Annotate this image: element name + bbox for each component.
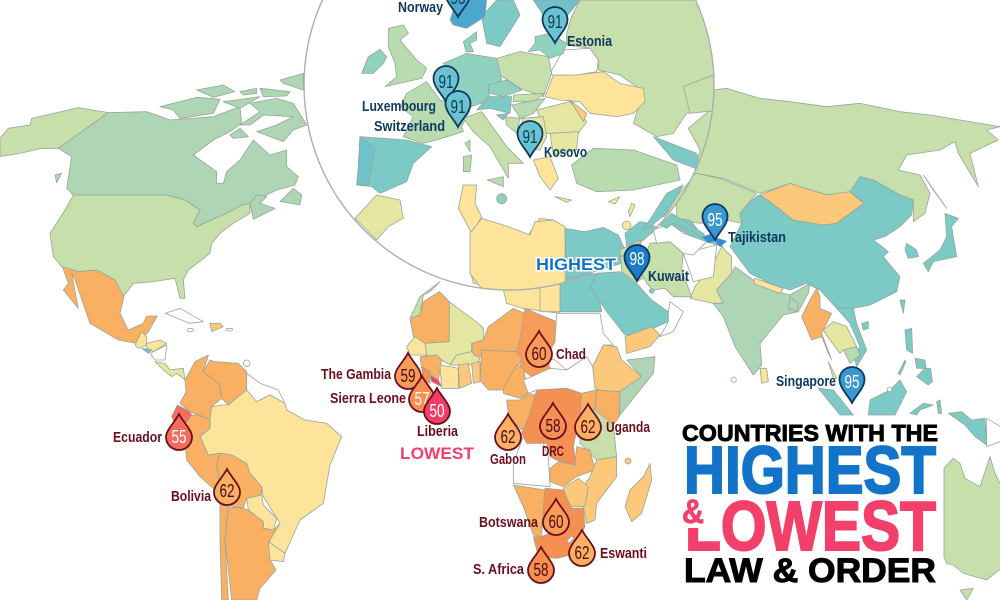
label: Sierra Leone: Sierra Leone [330,390,406,407]
drop: Gabon: 62 [500,427,516,447]
drop: Uganda [575,404,601,440]
inset circle background [304,0,714,290]
label: Estonia: Estonia [567,33,613,50]
drop: Sierra Leone [409,376,435,412]
map: Papua and Sulawesi [937,400,1000,447]
label: Uganda: Uganda [606,419,651,436]
label: LOWEST: LOWEST [400,444,475,463]
drop: Sierra Leone: 57 [414,389,430,409]
inset circle outline [304,0,714,290]
drop: Bolivia [214,469,240,505]
map: Middle East [470,203,717,353]
drop: Liberia: 50 [430,401,444,421]
drop: The Gambia [395,353,421,389]
drop: The Gambia: 59 [400,366,416,386]
label: Bolivia: Bolivia [171,488,212,505]
white cut-out above the L [680,496,716,528]
title line: Countries with the: COUNTRIES WITH THE [682,420,938,446]
label: Liberia: Liberia [417,423,459,440]
drop: Uganda: 62 [580,417,596,437]
title block [677,416,943,590]
title line: Law and order: LAW & ORDER [684,552,936,590]
pin: Switzerland [446,91,470,127]
label: Tajikistan: Tajikistan [728,229,786,246]
drop: Ecuador: 55 [172,427,186,447]
label: Botswana: Botswana [479,514,539,531]
title ampersand: & [682,493,704,531]
map: South America [155,355,342,600]
map: Asia and Russia [673,88,1000,415]
drop: South Africa [528,547,554,583]
drop: Ecuador [166,414,192,450]
pin: Tajikistan [702,204,728,240]
drop: Gabon [495,414,521,450]
title line: Highest: HIGHEST [684,433,936,508]
pin: Tajikistan: 95 [708,210,722,230]
pin: Kuwait [624,245,650,281]
drop: Liberia [424,388,450,424]
label: Gabon: Gabon [490,451,526,468]
label: The Gambia: The Gambia [321,366,392,383]
highlighted Tajikistan shape [702,233,727,247]
pin: Kosovo: 91 [522,127,538,147]
label: South Africa: S. Africa [473,561,525,578]
pin: Estonia: 91 [548,12,562,32]
drop: Bolivia: 62 [220,481,234,501]
pin: Norway [446,0,470,17]
drop: Eswanti: 62 [574,543,590,563]
drop: DRC: 58 [546,416,560,436]
label: Chad: Chad [556,346,586,363]
label: Luxembourg: Luxembourg [362,98,436,115]
label: DRC: DRC [542,443,564,460]
inset map: Europe [355,0,730,300]
title line: Lowest: LOWEST [685,487,936,565]
pin: Luxembourg [434,66,458,102]
pin: Luxembourg: 91 [438,72,454,92]
drop: Chad: 60 [532,344,546,364]
drop: DRC [540,403,566,439]
label: Singapore: Singapore [776,373,836,390]
pin: Kosovo [518,121,542,157]
drop: South Africa: 58 [534,560,548,580]
pin: Switzerland: 91 [450,97,466,117]
map: Australia [944,457,1000,600]
label: Eswanti: Eswanti [600,545,647,562]
map: Africa [407,282,655,558]
label: Kosovo: Kosovo [544,144,587,161]
pin: Estonia [542,7,568,43]
drop: Chad [526,331,552,367]
drop: Botswana [543,499,569,535]
drop: Eswanti [569,530,595,566]
pin: Singapore [840,367,864,403]
pin: Singapore: 95 [844,372,860,392]
drop: Botswana: 60 [548,512,564,532]
label: HIGHEST: HIGHEST [536,255,617,274]
label: Ecuador: Ecuador [113,429,162,446]
pin: Kuwait: 98 [630,249,644,269]
label: Switzerland: Switzerland [374,118,445,135]
map: North America [0,73,307,360]
label: Kuwait: Kuwait [648,268,689,285]
title background [677,416,943,590]
